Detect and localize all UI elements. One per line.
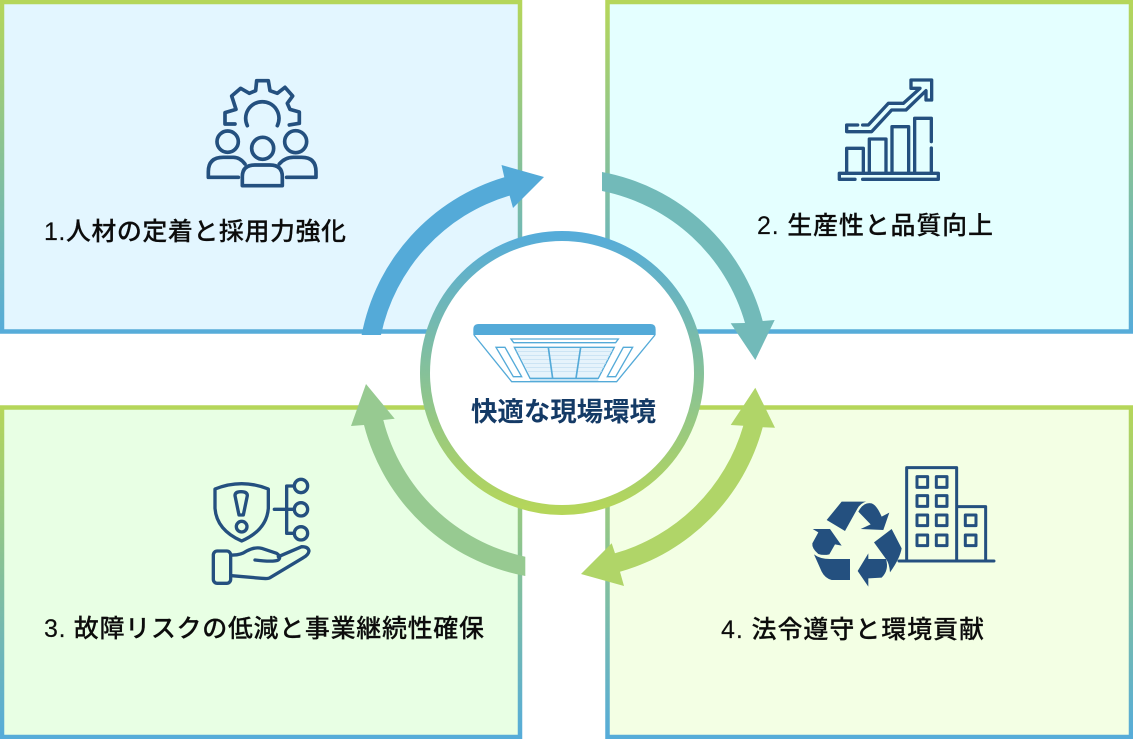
icon: ceiling air conditioner	[473, 324, 656, 382]
icon: recycle and building	[812, 468, 994, 587]
panel: 2 productivity	[608, 2, 1131, 332]
heading: 3: 3. 故障リスクの低減と事業継続性確保	[44, 615, 484, 643]
title: 快適な現場環境	[471, 397, 656, 427]
center circle	[425, 236, 699, 510]
icon: shield and hand	[213, 479, 309, 583]
heading: 1: 1.人材の定着と採用力強化	[44, 218, 346, 246]
arrow: bottom right double	[581, 388, 775, 586]
panel: 1 talent	[2, 2, 520, 332]
arrow: top right	[602, 172, 775, 360]
arrow: bottom left	[351, 384, 525, 576]
panel: 4 compliance	[608, 408, 1131, 737]
heading: 2: 2. 生産性と品質向上	[757, 212, 993, 240]
panel: 3 risk	[2, 408, 520, 737]
icon: gear and people	[208, 81, 316, 186]
icon: growth chart	[839, 80, 938, 179]
arrow: top left	[362, 165, 544, 335]
heading: 4: 4. 法令遵守と環境貢献	[721, 616, 984, 644]
